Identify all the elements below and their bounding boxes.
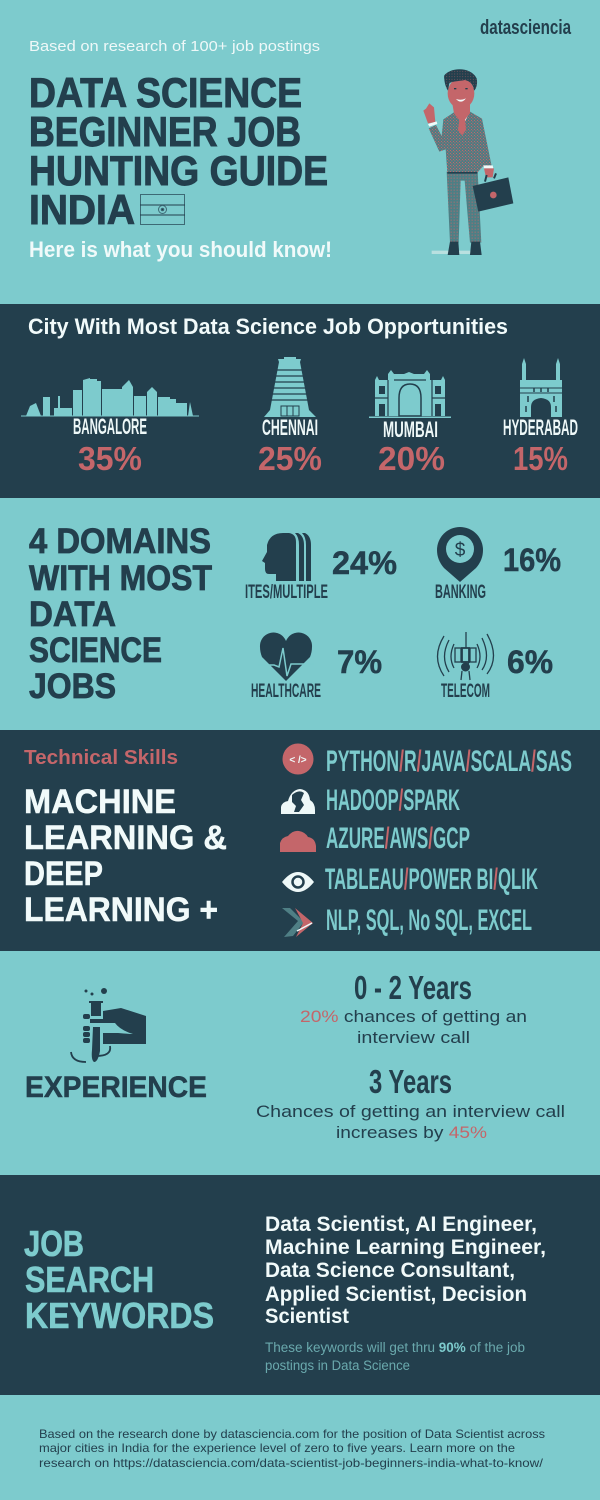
value: Banking 16%: 16% (503, 542, 561, 578)
note: keywords coverage (265, 1340, 525, 1373)
value: ITES 24%: 24% (332, 545, 397, 581)
icon: code (282, 744, 314, 774)
label: ITES/Multiple: ITES/MULTIPLE (245, 582, 328, 603)
title (29, 69, 328, 233)
text: increase by 45%: Chances of getting an interview call (256, 1102, 565, 1121)
note: keywords coverage: postings in Data Science (265, 1358, 410, 1373)
panel: experience (25, 969, 565, 1142)
label: Telecom: TELECOM (441, 681, 490, 702)
list: job titles: Data Science Consultant, (265, 1259, 515, 1282)
skills: visualisation: TABLEAU/POWER BI/QLIK (325, 863, 538, 896)
heading: domains: 4 DOMAINS (29, 522, 211, 561)
heading: keywords: KEYWORDS (25, 1295, 214, 1336)
text: machine learning: LEARNING & (24, 819, 227, 857)
footer: source note: Based on the research done by datasciencia.com for the position of Data Scientist across (39, 1427, 545, 1441)
heading: domains: WITH MOST (29, 559, 212, 598)
icon: banking pin (437, 527, 483, 582)
value: Hyderabad 15%: 15% (513, 440, 568, 477)
list: job titles (265, 1213, 546, 1328)
label: Bangalore: BANGALORE (73, 414, 147, 439)
icon: code: < /> (289, 755, 307, 766)
label: Banking: BANKING (435, 582, 486, 603)
label: Mumbai: MUMBAI (383, 417, 438, 442)
panel: domains (29, 522, 561, 706)
icon: healthcare heart (258, 633, 314, 681)
icon: banking pin: $ (455, 540, 466, 561)
footer: source note (39, 1427, 545, 1470)
value: Chennai 25%: 25% (258, 440, 322, 477)
heading: domains (29, 522, 212, 706)
skills: cloud: AZURE/AWS/GCP (326, 822, 470, 855)
title: BEGINNER JOB (29, 108, 301, 155)
heading: domains: JOBS (29, 667, 116, 706)
icon: hand holding test tube (71, 988, 146, 1062)
icon: telecom tower (438, 632, 494, 680)
text: 20% chances (300, 1007, 527, 1047)
panel: job search keywords (0, 1175, 600, 1395)
label: Chennai: CHENNAI (262, 415, 318, 440)
heading: 0-2 years: 0 - 2 Years (354, 969, 472, 1006)
heading: domains: SCIENCE (29, 631, 162, 670)
text: increase by 45% (256, 1102, 565, 1142)
panel: cities (0, 304, 600, 498)
text: machine learning (24, 783, 227, 929)
heading: 3 years: 3 Years (369, 1063, 452, 1100)
value: Mumbai 20%: 20% (378, 440, 445, 477)
heading: domains: DATA (29, 595, 116, 634)
list: job titles: Data Scientist, AI Engineer, (265, 1213, 537, 1236)
title: DATA SCIENCE (29, 69, 302, 116)
skills: languages: PYTHON/R/JAVA/SCALA/SAS (326, 745, 572, 778)
footer: source note: major cities in India for the experience level of zero to five years. Learn more on the (39, 1441, 515, 1455)
panel: technical skills (0, 730, 600, 951)
heading: technical skills: Technical Skills (24, 747, 178, 769)
title: HUNTING GUIDE (29, 147, 328, 194)
icon: Chennai temple (264, 357, 316, 417)
icon: chevrons (282, 908, 313, 937)
skills: big data: HADOOP/SPARK (326, 784, 460, 817)
heading: keywords: JOB (24, 1223, 84, 1264)
text: machine learning: DEEP (24, 855, 103, 893)
list: job titles: Applied Scientist, Decision (265, 1283, 527, 1306)
icon: ITES head (262, 533, 311, 581)
footer: source note: research on https://datasciencia.com/data-scientist-job-beginners-india-what-to-know/ (39, 1456, 544, 1470)
list: job titles: Machine Learning Engineer, (265, 1236, 546, 1259)
text: machine learning: MACHINE (24, 783, 176, 821)
icon: eye (282, 872, 314, 892)
icon: cloud (280, 831, 316, 852)
icon: Mumbai gateway (369, 370, 451, 418)
text: 20% chances: interview call (357, 1028, 470, 1047)
title: INDIA (29, 186, 135, 233)
label: Healthcare: HEALTHCARE (251, 681, 321, 702)
note: keywords coverage: These keywords will get thru 90% of the job (265, 1340, 525, 1355)
icon: India flag (140, 194, 185, 224)
value: Telecom 6%: 6% (507, 644, 553, 680)
heading: cities: City With Most Data Science Job Opportunities (28, 314, 508, 339)
subtitle: Here is what you should know! (29, 237, 332, 262)
panel: header (29, 17, 572, 262)
icon: Hadoop cloud (281, 789, 315, 814)
icon: Hyderabad Charminar (520, 358, 562, 417)
text: research note: Based on research of 100+ job postings (29, 38, 320, 55)
list: job titles: Scientist (265, 1305, 349, 1328)
text: 20% chances: 20% chances of getting an (300, 1007, 527, 1026)
heading: experience: EXPERIENCE (25, 1071, 207, 1104)
value: Healthcare 7%: 7% (337, 644, 382, 680)
text: increase by 45%: increases by 45% (336, 1123, 487, 1142)
heading: keywords (24, 1223, 214, 1336)
icon: Bangalore skyline (21, 378, 199, 416)
text: machine learning: LEARNING + (24, 891, 218, 929)
heading: keywords: SEARCH (25, 1259, 154, 1300)
illustration: businessman with briefcase (423, 69, 513, 255)
logo: datasciencia: datasciencia (480, 17, 572, 39)
value: Bangalore 35%: 35% (78, 440, 142, 477)
